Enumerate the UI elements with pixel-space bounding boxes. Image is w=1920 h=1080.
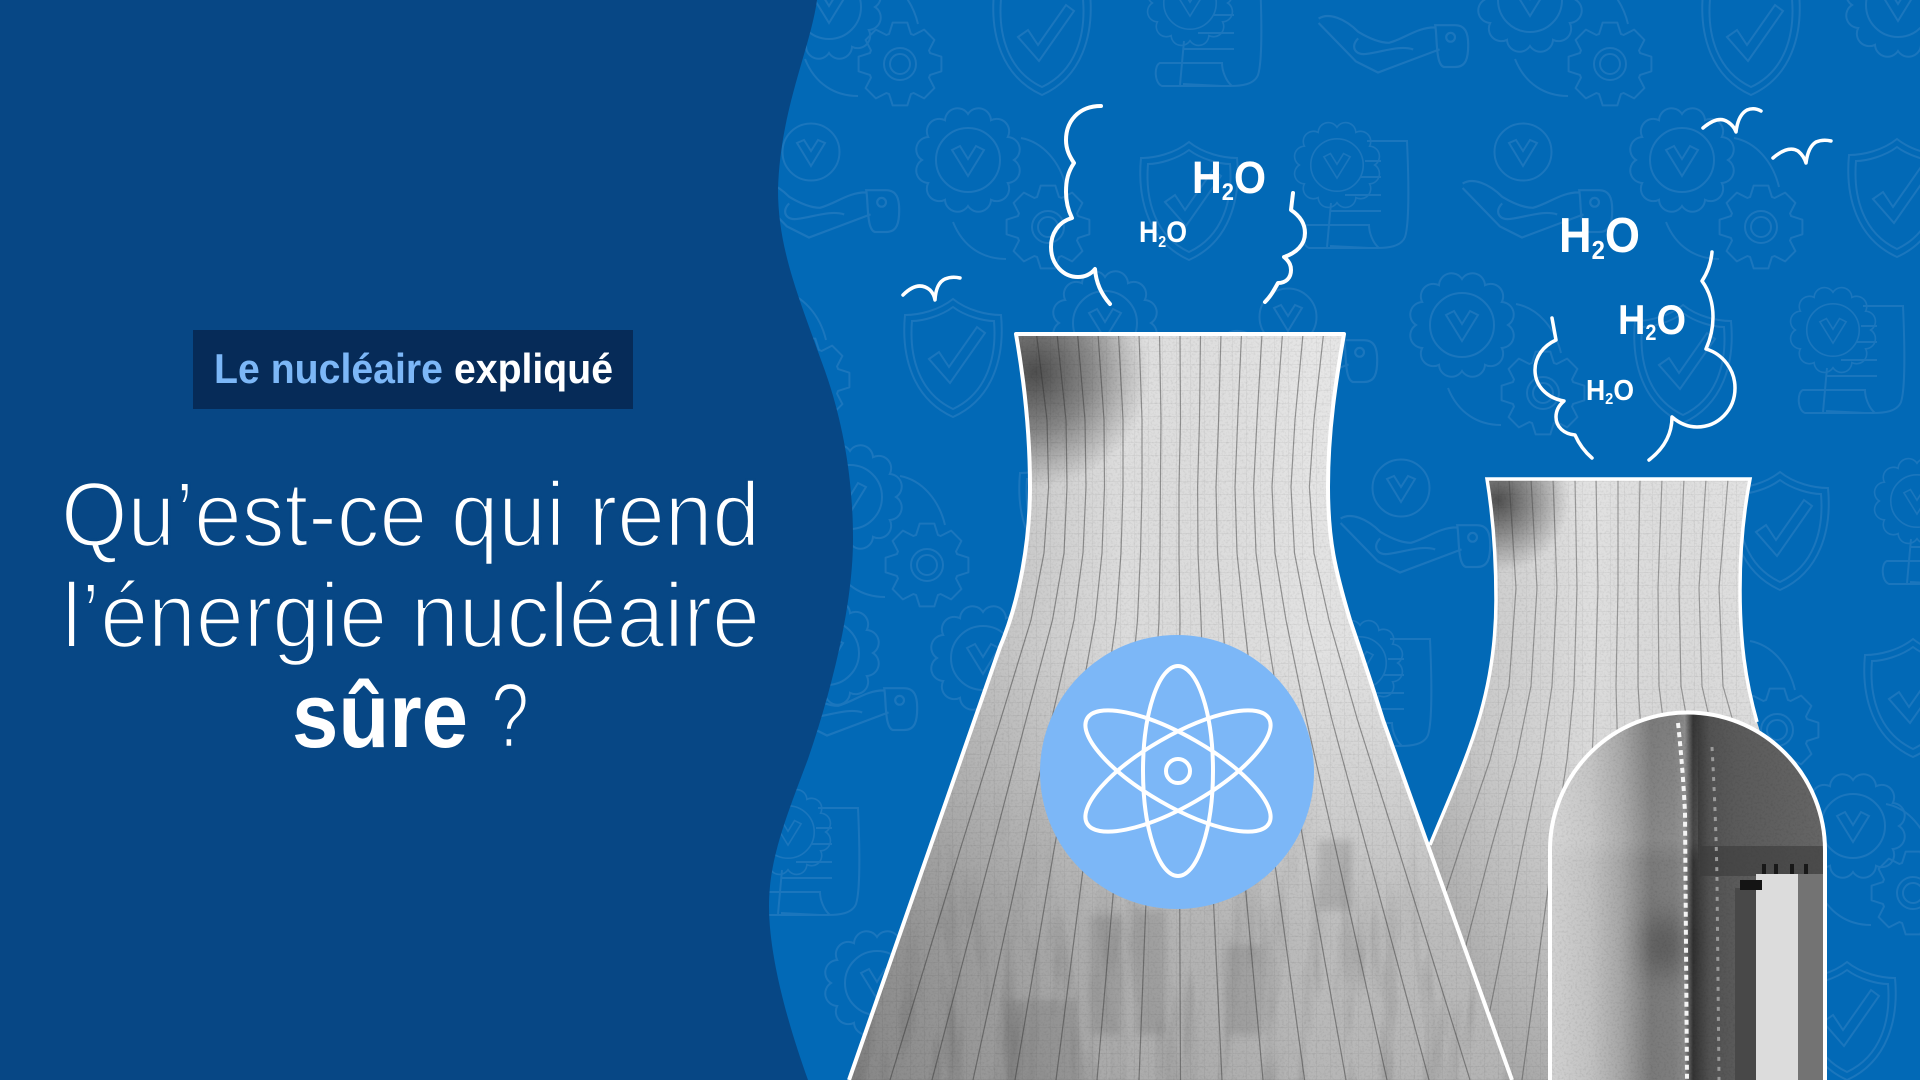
- label: H2O small: 2: [1605, 391, 1613, 408]
- steam cloud: front tower: [1051, 106, 1305, 304]
- building annex: [1700, 846, 1828, 1080]
- label: H2O large: 2: [1222, 179, 1234, 206]
- icon: atom in blue circle: [1040, 635, 1314, 909]
- title: question: ?: [491, 665, 529, 767]
- title: question: sûre: [292, 665, 468, 767]
- reactor building: [1548, 708, 1828, 1080]
- label: H2O small: H: [1586, 375, 1607, 407]
- label: H2O large: H: [1192, 152, 1224, 203]
- label: H2O small: O: [1613, 375, 1634, 407]
- label: H2O small: H: [1139, 216, 1161, 249]
- title: question: [61, 464, 760, 767]
- label: H2O large: 2: [1592, 235, 1605, 265]
- label: H2O large: H: [1559, 209, 1594, 263]
- background: pattern of safety icons: [713, 0, 1920, 1080]
- label: H2O small: 2: [1158, 234, 1166, 251]
- label: H2O small: O: [1166, 216, 1187, 249]
- panel: dark blue wave on the left: [0, 0, 853, 1080]
- label: H2O large: O: [1234, 152, 1266, 203]
- badge: Le nucléaire expliqué: Le nucléaire: [214, 345, 443, 392]
- cooling tower: rear: [1429, 477, 1760, 1080]
- label: H2O medium: 2: [1645, 320, 1656, 345]
- badge: Le nucléaire expliqué: expliqué: [454, 345, 613, 392]
- label: H2O medium: H: [1618, 296, 1648, 343]
- badge: Le nucléaire expliqué: [193, 330, 633, 409]
- steam cloud: rear tower: [1535, 209, 1735, 460]
- title: question: l’énergie nucléaire: [62, 565, 760, 667]
- title: question: Qu’est-ce qui rend: [61, 464, 760, 566]
- icon: birds: [903, 109, 1831, 300]
- cooling tower: front: [840, 330, 1520, 1080]
- label: H2O large: O: [1605, 209, 1640, 263]
- label: H2O medium: O: [1656, 296, 1686, 343]
